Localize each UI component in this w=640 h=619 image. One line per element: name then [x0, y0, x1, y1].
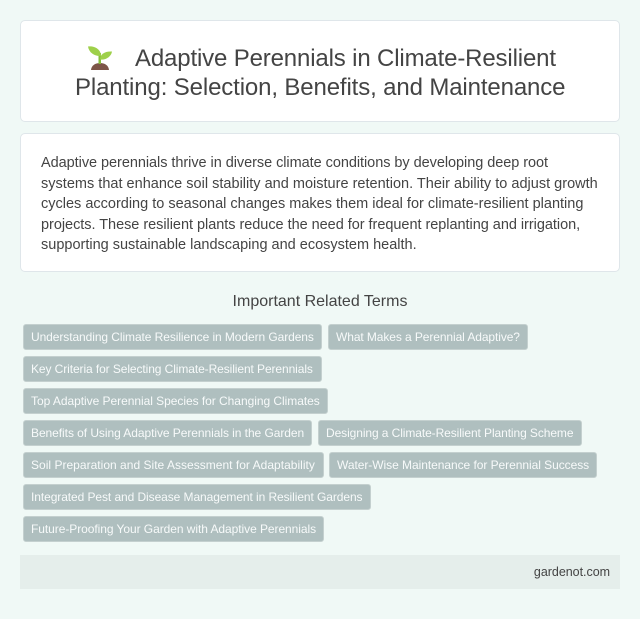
description text: Adaptive perennials thrive in diverse climate conditions by developing deep root — [41, 155, 548, 171]
chip: Integrated Pest and Disease Management in Resilient Gardens — [31, 490, 362, 504]
chip — [23, 452, 324, 478]
chip: Soil Preparation and Site Assessment for Adaptability — [31, 458, 315, 472]
heading: related terms: Important Related Terms — [233, 293, 407, 310]
chip: Top Adaptive Perennial Species for Changing Climates — [31, 394, 320, 408]
chip — [328, 324, 528, 350]
chip — [329, 452, 597, 478]
related terms chips — [23, 324, 597, 542]
chip — [23, 356, 322, 382]
chip — [318, 420, 582, 446]
description text — [41, 155, 598, 253]
chip: What Makes a Perennial Adaptive? — [336, 330, 520, 344]
icon: seedling — [88, 46, 112, 70]
footer site name: gardenot.com — [534, 565, 610, 579]
description text: projects. These resilient plants reduce the need for frequent replanting and irrigation, — [41, 216, 580, 232]
title: Planting: Selection, Benefits, and Maintenance — [75, 74, 565, 101]
chip: Benefits of Using Adaptive Perennials in the Garden — [31, 426, 304, 440]
description text: cycles according to seasonal changes makes them ideal for climate-resilient planting — [41, 196, 583, 212]
chip: Future-Proofing Your Garden with Adaptive Perennials — [31, 522, 316, 536]
chip: Understanding Climate Resilience in Modern Gardens — [31, 330, 314, 344]
chip — [23, 420, 312, 446]
title — [75, 45, 565, 101]
chip — [23, 516, 324, 542]
footer bar — [20, 555, 620, 589]
chip — [23, 324, 322, 350]
description panel — [20, 133, 620, 272]
chip — [23, 484, 371, 510]
chip: Key Criteria for Selecting Climate-Resilient Perennials — [31, 362, 313, 376]
chip — [23, 388, 328, 414]
description text: systems that enhance soil stability and moisture retention. Their ability to adjust growth — [41, 176, 598, 192]
chip: Designing a Climate-Resilient Planting Scheme — [326, 426, 573, 440]
chip: Water-Wise Maintenance for Perennial Success — [337, 458, 589, 472]
description text: supporting sustainable landscaping and ecosystem health. — [41, 237, 417, 253]
header panel — [20, 20, 620, 122]
title: Adaptive Perennials in Climate-Resilient — [135, 45, 556, 72]
